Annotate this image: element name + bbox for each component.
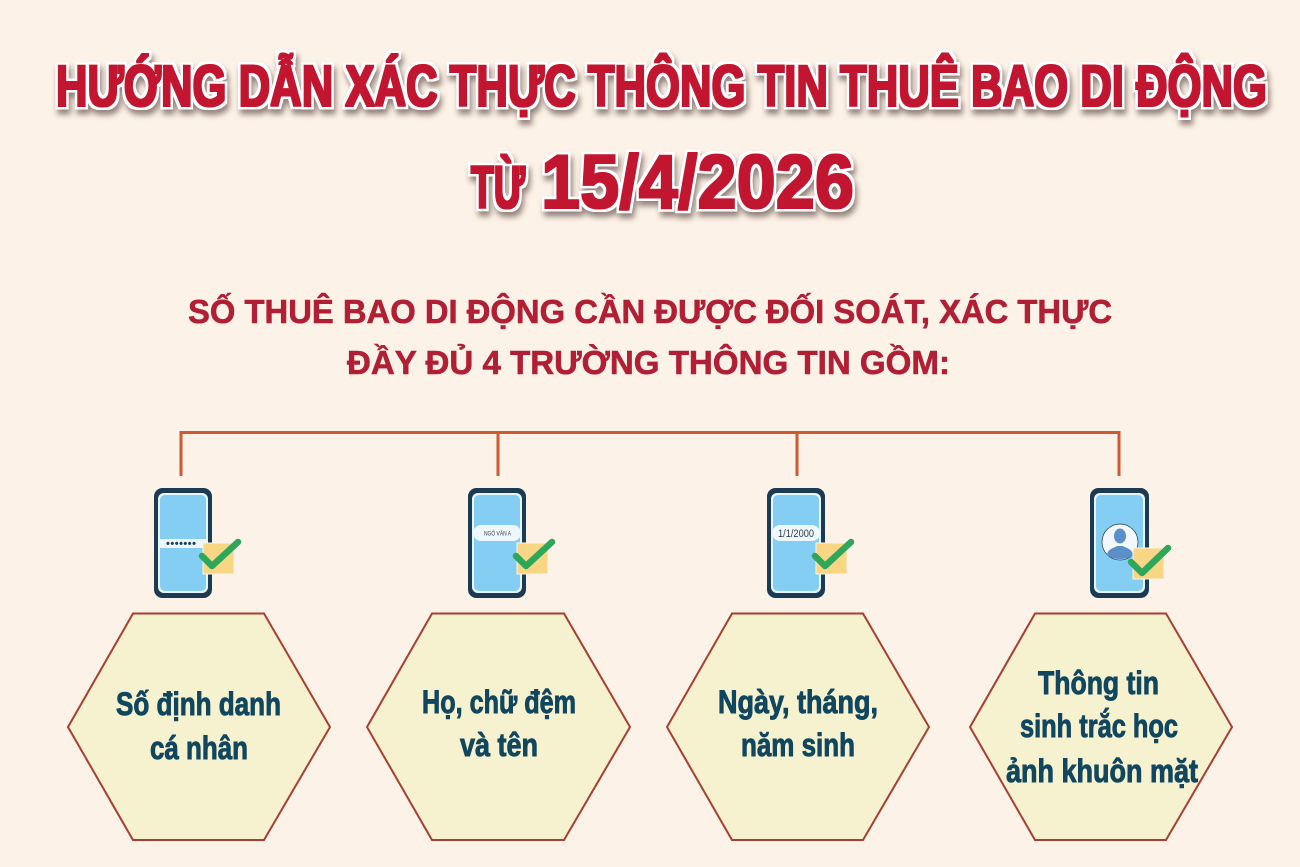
icon: phone with name: NGÔ VĂN A [484, 530, 511, 538]
panel: personal ID number: cá nhân [150, 730, 248, 766]
title: TỪ [471, 154, 525, 221]
panel: facial biometrics: sinh trắc học [1020, 708, 1178, 744]
subtitle: ĐẦY ĐỦ 4 TRƯỜNG THÔNG TIN GỒM: [347, 343, 950, 381]
panel: personal ID number: Số định danh [116, 686, 281, 722]
subtitle [188, 292, 1112, 381]
subtitle: SỐ THUÊ BAO DI ĐỘNG CẦN ĐƯỢC ĐỐI SOÁT, XÁC THỰC [188, 292, 1112, 330]
connector lines [181, 432, 1119, 476]
panel: date of birth [667, 614, 929, 840]
panel: date of birth: năm sinh [741, 727, 855, 763]
icon: phone with face photo [1092, 490, 1168, 596]
icon: phone with ID number: ••••••• [166, 538, 196, 550]
panel: date of birth: Ngày, tháng, [718, 684, 878, 720]
panel: facial biometrics: ảnh khuôn mặt [1006, 753, 1198, 789]
panel: full name [367, 614, 630, 840]
panel: full name: Họ, chữ đệm [422, 684, 576, 720]
icon: phone with date of birth: 1/1/2000 [778, 528, 814, 540]
icon: phone with date of birth [768, 490, 851, 596]
panel: full name: và tên [460, 727, 538, 763]
panel: facial biometrics [970, 614, 1232, 840]
icon: phone with name [470, 490, 552, 596]
title [56, 54, 1267, 225]
panel: personal ID number [68, 614, 330, 840]
icon: phone with ID number [156, 490, 238, 596]
title: 15/4/2026 [541, 140, 854, 225]
panel: facial biometrics: Thông tin [1038, 665, 1159, 701]
